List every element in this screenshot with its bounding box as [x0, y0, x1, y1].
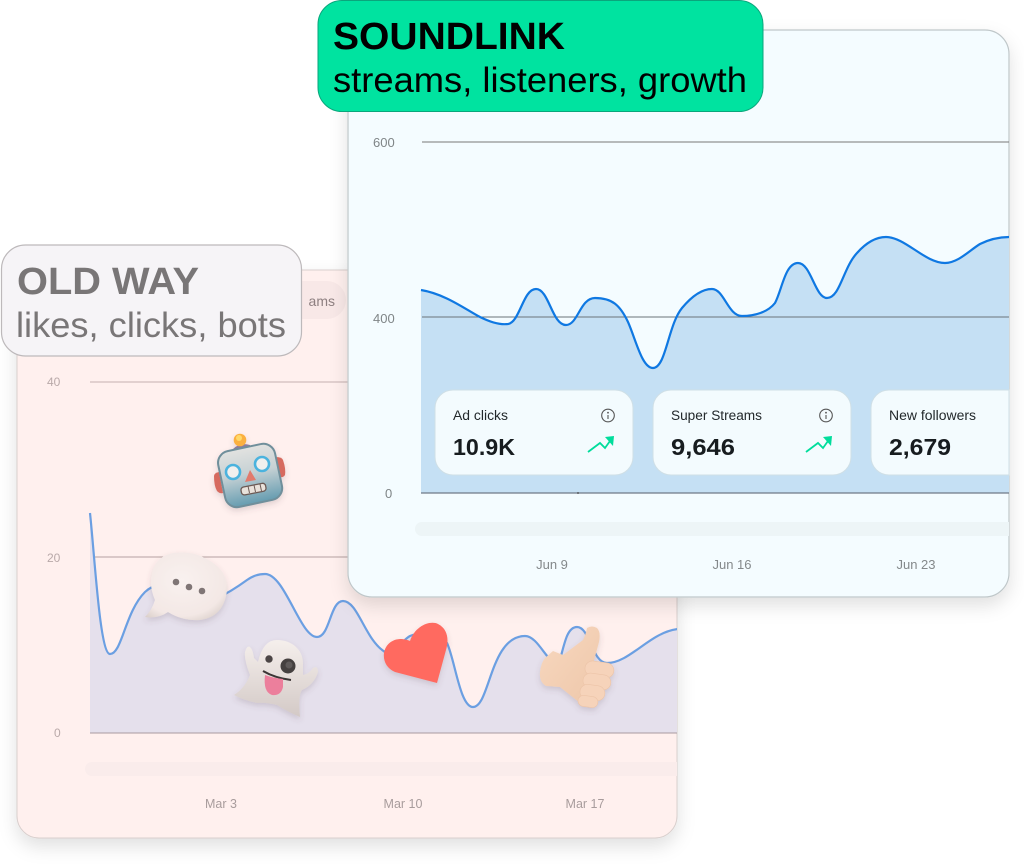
stat card: new followers — [871, 390, 1009, 475]
filter pill: ams — [309, 293, 335, 309]
icon: speech bubble — [145, 552, 227, 620]
label: soundlink — [318, 0, 763, 112]
axis labels: old way: 0 — [54, 726, 61, 740]
date labels: old way: Mar 3 — [205, 797, 237, 811]
date labels: soundlink — [536, 557, 936, 572]
area chart: old way — [90, 513, 678, 733]
stat card: super streams — [653, 390, 851, 475]
stat card: ad clicks: 10.9K — [453, 434, 515, 460]
icon: trend arrow — [588, 436, 614, 452]
axis labels: old way — [47, 375, 61, 740]
panel: old way dashboard — [17, 270, 678, 838]
label: old way — [2, 245, 302, 356]
icon: info — [820, 409, 832, 422]
stat card: new followers: New followers — [889, 408, 976, 423]
stat card: ad clicks — [435, 390, 633, 475]
axis labels: old way: 40 — [47, 375, 61, 389]
date labels: old way: Mar 17 — [566, 797, 604, 811]
heading: soundlink: SOUNDLINK — [333, 16, 566, 58]
subheading: soundlink: streams, listeners, growth — [333, 61, 747, 100]
area chart: soundlink — [421, 237, 1010, 493]
subheading: old way: likes, clicks, bots — [16, 306, 286, 345]
scrollbar: old way — [85, 762, 677, 776]
axis labels: soundlink: 400 — [373, 311, 395, 326]
icon: heart — [384, 623, 447, 683]
icon: thumbs up — [540, 626, 615, 708]
stat card: super streams: Super Streams — [671, 408, 762, 423]
date labels: soundlink: Jun 23 — [896, 557, 936, 572]
icon: ghost — [234, 640, 318, 717]
icon: trend arrow — [806, 436, 832, 452]
stat card: super streams: 9,646 — [671, 434, 735, 460]
axis labels: soundlink — [373, 135, 395, 501]
date labels: old way: Mar 10 — [384, 797, 422, 811]
date labels: soundlink: Jun 9 — [536, 557, 568, 572]
icon: robot — [214, 434, 285, 509]
date labels: old way — [205, 797, 604, 811]
axis labels: soundlink: 600 — [373, 135, 395, 150]
stat card: ad clicks: Ad clicks — [453, 408, 508, 423]
axis labels: old way: 20 — [47, 551, 61, 565]
axis labels: soundlink: 0 — [385, 486, 392, 501]
date labels: soundlink: Jun 16 — [712, 557, 752, 572]
stat card: new followers: 2,679 — [889, 434, 951, 460]
panel: soundlink dashboard — [348, 30, 1010, 597]
filter pill — [230, 281, 346, 319]
heading: old way: OLD WAY — [17, 261, 199, 303]
scrollbar: soundlink — [415, 522, 1009, 536]
icon: info — [602, 409, 614, 422]
